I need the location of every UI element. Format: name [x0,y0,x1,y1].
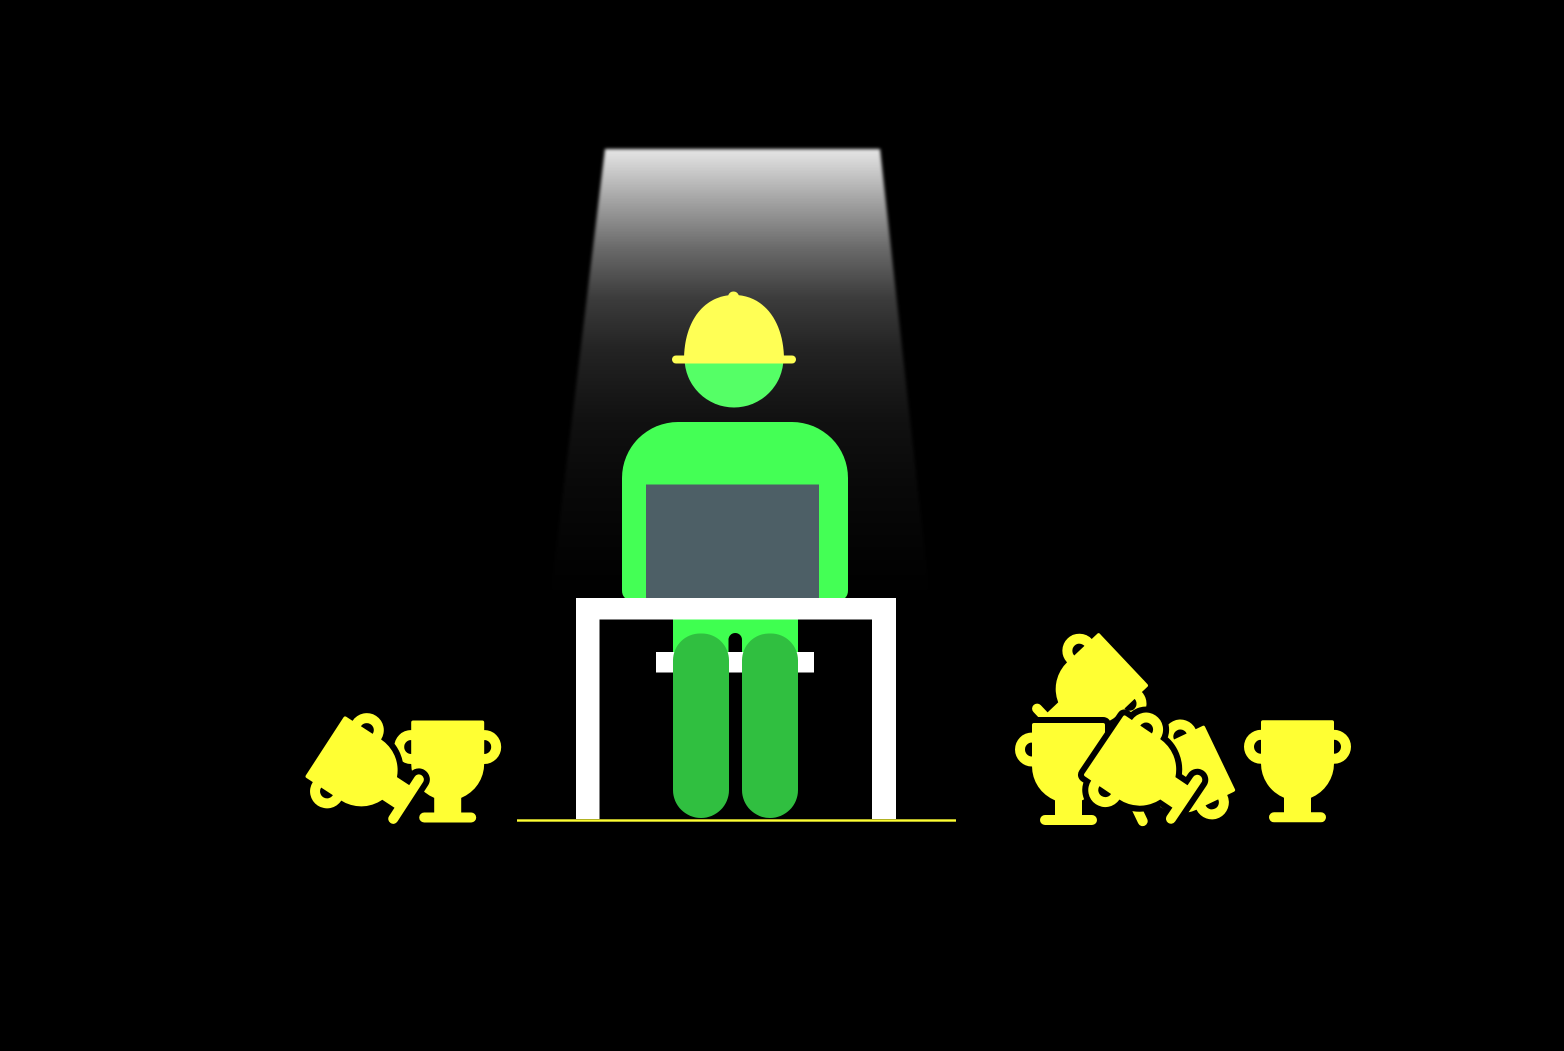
floor line [517,819,956,822]
spotlight beam [550,149,930,600]
desk [576,598,896,819]
left group: upright trophy [394,720,501,822]
head [684,308,784,408]
laptop [646,484,819,598]
hard hat [672,292,796,364]
worker figure [622,292,848,663]
torso [622,422,848,600]
right group: standalone upright trophy [1244,720,1351,822]
right leg [742,634,798,818]
right group: back tipped trophy [1105,710,1243,850]
gap between legs [728,633,742,663]
left group: tipped trophy [296,701,439,847]
left leg [673,634,729,818]
right group: top tipped trophy [1013,620,1160,768]
pelvis [673,610,798,652]
right group: upright trophy behind [1015,723,1122,825]
desk crossbar [656,652,814,672]
right group: front tipped trophy [1074,701,1218,846]
